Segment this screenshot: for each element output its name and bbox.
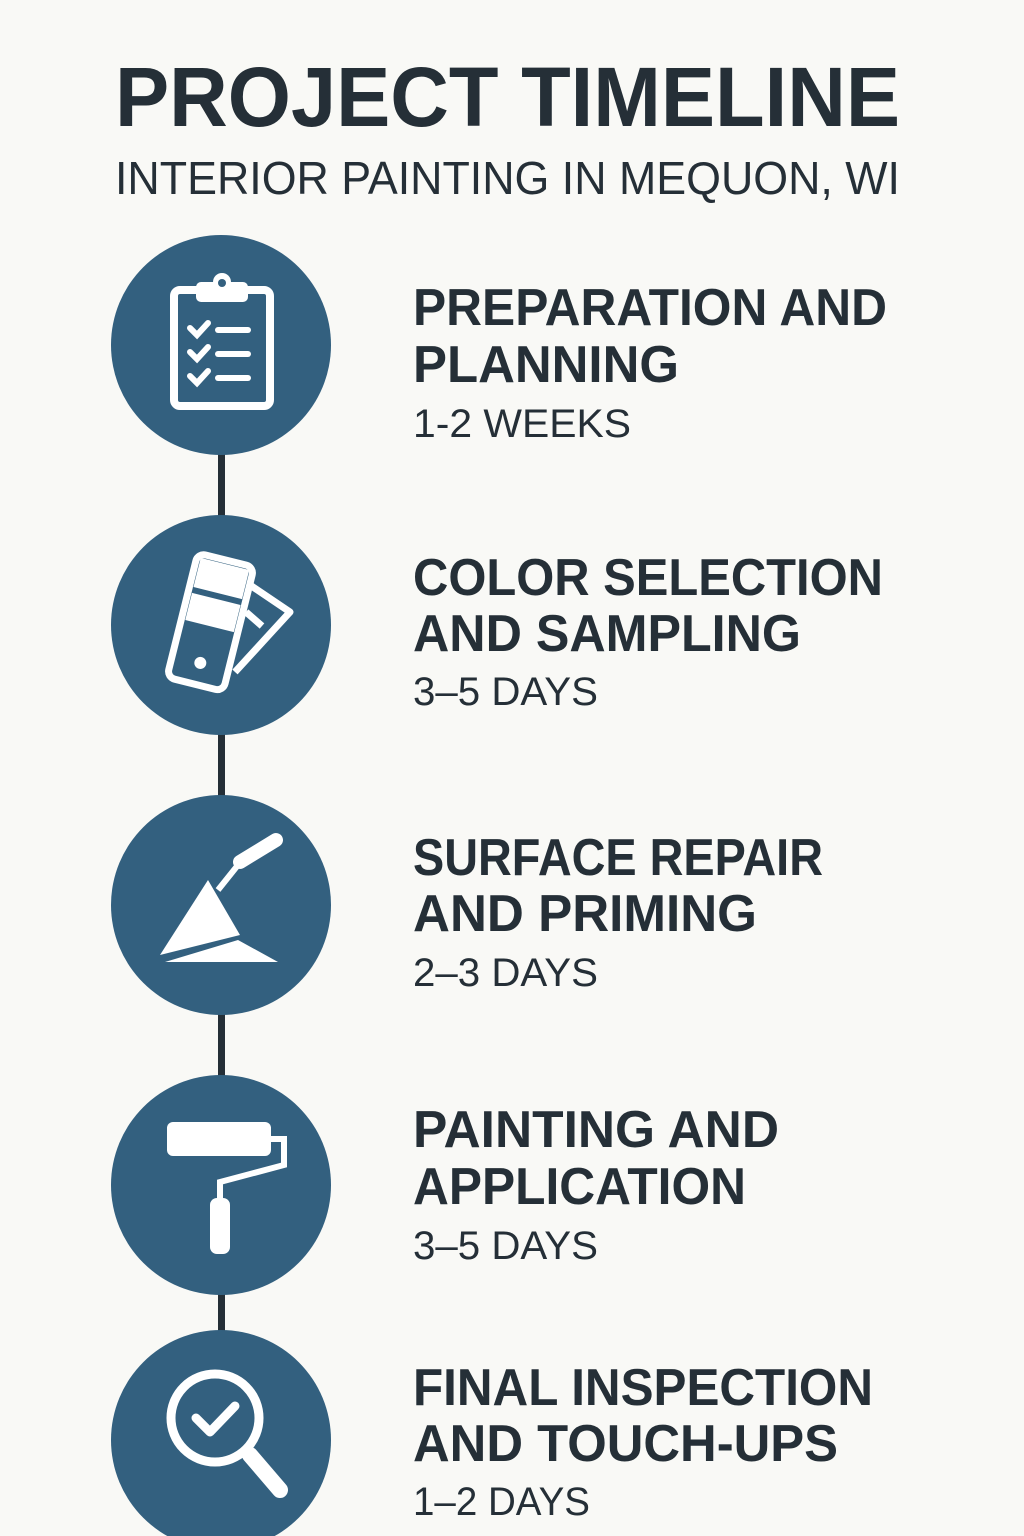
step 1 text: PLANNING xyxy=(413,336,679,394)
step 2 text: 3–5 DAYS xyxy=(413,670,598,714)
step 3 icon: trowel xyxy=(111,795,331,1015)
step 5 text: 1–2 DAYS xyxy=(413,1480,590,1524)
subtitle: INTERIOR PAINTING IN MEQUON, WI xyxy=(115,152,900,204)
step 3 text: AND PRIMING xyxy=(413,885,757,943)
step 2 text xyxy=(413,549,883,714)
step 3 text: 2–3 DAYS xyxy=(413,951,598,995)
step 4 text: 3–5 DAYS xyxy=(413,1224,598,1268)
step 5 text xyxy=(413,1359,873,1524)
step 2 text: COLOR SELECTION xyxy=(413,549,883,607)
step 3 text xyxy=(413,829,823,995)
step 2 text: AND SAMPLING xyxy=(413,605,801,663)
timeline connector xyxy=(218,440,225,1360)
step 1 icon: clipboard xyxy=(111,235,331,455)
step 1 text xyxy=(413,279,887,446)
step 4 text xyxy=(413,1101,779,1268)
step 1 text: 1-2 WEEKS xyxy=(413,402,631,446)
step 5 text: AND TOUCH-UPS xyxy=(413,1415,838,1473)
step 4 text: PAINTING AND xyxy=(413,1101,779,1159)
title: PROJECT TIMELINE xyxy=(115,50,900,144)
step 5 text: FINAL INSPECTION xyxy=(413,1359,873,1417)
step 4 text: APPLICATION xyxy=(413,1158,746,1216)
step 3 text: SURFACE REPAIR xyxy=(413,829,823,887)
step 5 icon: magnifier xyxy=(111,1330,331,1536)
step 2 icon: color swatches xyxy=(111,515,331,735)
step 4 icon: paint roller xyxy=(111,1075,331,1295)
step 1 text: PREPARATION AND xyxy=(413,279,887,337)
